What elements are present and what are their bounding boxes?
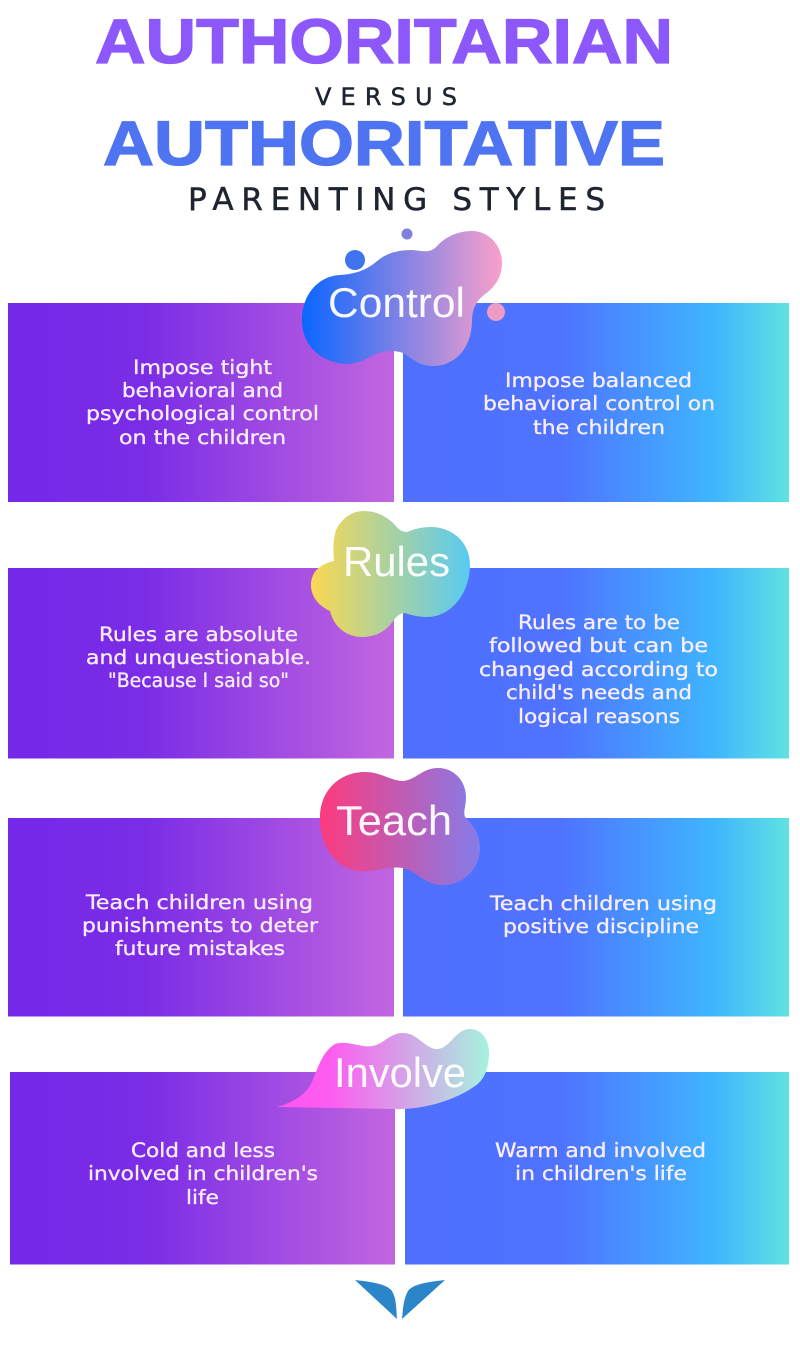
blob: teach [320,768,480,885]
panel: control authoritative: Impose balanced [505,369,692,392]
icon: logo wings [355,1280,445,1319]
panel: teach authoritative: positive discipline [503,915,699,938]
panel: teach authoritative: Teach children using [489,892,717,915]
panel: control authoritarian: on the children [119,426,286,449]
panel: involve authoritative [405,1072,789,1264]
blob: control: Control [328,279,465,326]
panel: rules authoritative [403,568,789,758]
panel: teach authoritarian [8,818,394,1016]
panel: control authoritarian: psychological control [86,402,319,425]
panel: teach authoritative [403,818,789,1016]
panel: involve authoritarian: life [186,1186,219,1209]
panel: rules authoritarian: Rules are absolute [99,623,298,646]
panel: rules authoritarian [8,568,394,758]
blob: involve: Involve [334,1049,466,1096]
panel: control authoritarian [8,303,394,502]
panel: control authoritative: the children [533,416,665,439]
panel: teach authoritarian: punishments to deter [82,914,319,937]
heading: authoritarian: AUTHORITARIAN [95,7,673,77]
blob: rules: Rules [343,538,450,585]
panel: rules authoritative: Rules are to be [518,611,680,634]
panel: teach authoritarian: Teach children using [85,891,313,914]
panel: rules authoritative: logical reasons [518,705,680,728]
heading: parenting styles: PARENTING STYLES [188,182,605,218]
heading: versus: VERSUS [315,83,457,111]
panel: rules authoritarian: "Because I said so" [108,669,289,692]
blob: control [302,228,505,366]
panel: involve authoritarian [10,1072,395,1264]
blob: rules [311,511,470,637]
panel: control authoritative: behavioral control on [483,392,715,415]
panel: involve authoritarian: Cold and less [131,1139,275,1162]
heading: authoritative: AUTHORITATIVE [103,109,665,179]
panel: teach authoritarian: future mistakes [115,937,285,960]
panel: involve authoritative: Warm and involved [495,1139,706,1162]
panel: involve authoritarian: involved in children's [88,1162,318,1185]
panel: involve authoritative: in children's life [515,1162,687,1185]
panel: rules authoritative: child's needs and [506,681,692,704]
panel: rules authoritative: followed but can be [489,634,708,657]
panel: control authoritative [403,303,789,502]
panel: rules authoritative: changed according to [479,658,718,681]
blob: teach: Teach [336,797,452,844]
blob: involve [277,1029,489,1109]
panel: control authoritarian: Impose tight [133,356,272,379]
panel: control authoritarian: behavioral and [122,379,283,402]
panel: rules authoritarian: and unquestionable. [86,646,311,669]
title [95,7,673,218]
